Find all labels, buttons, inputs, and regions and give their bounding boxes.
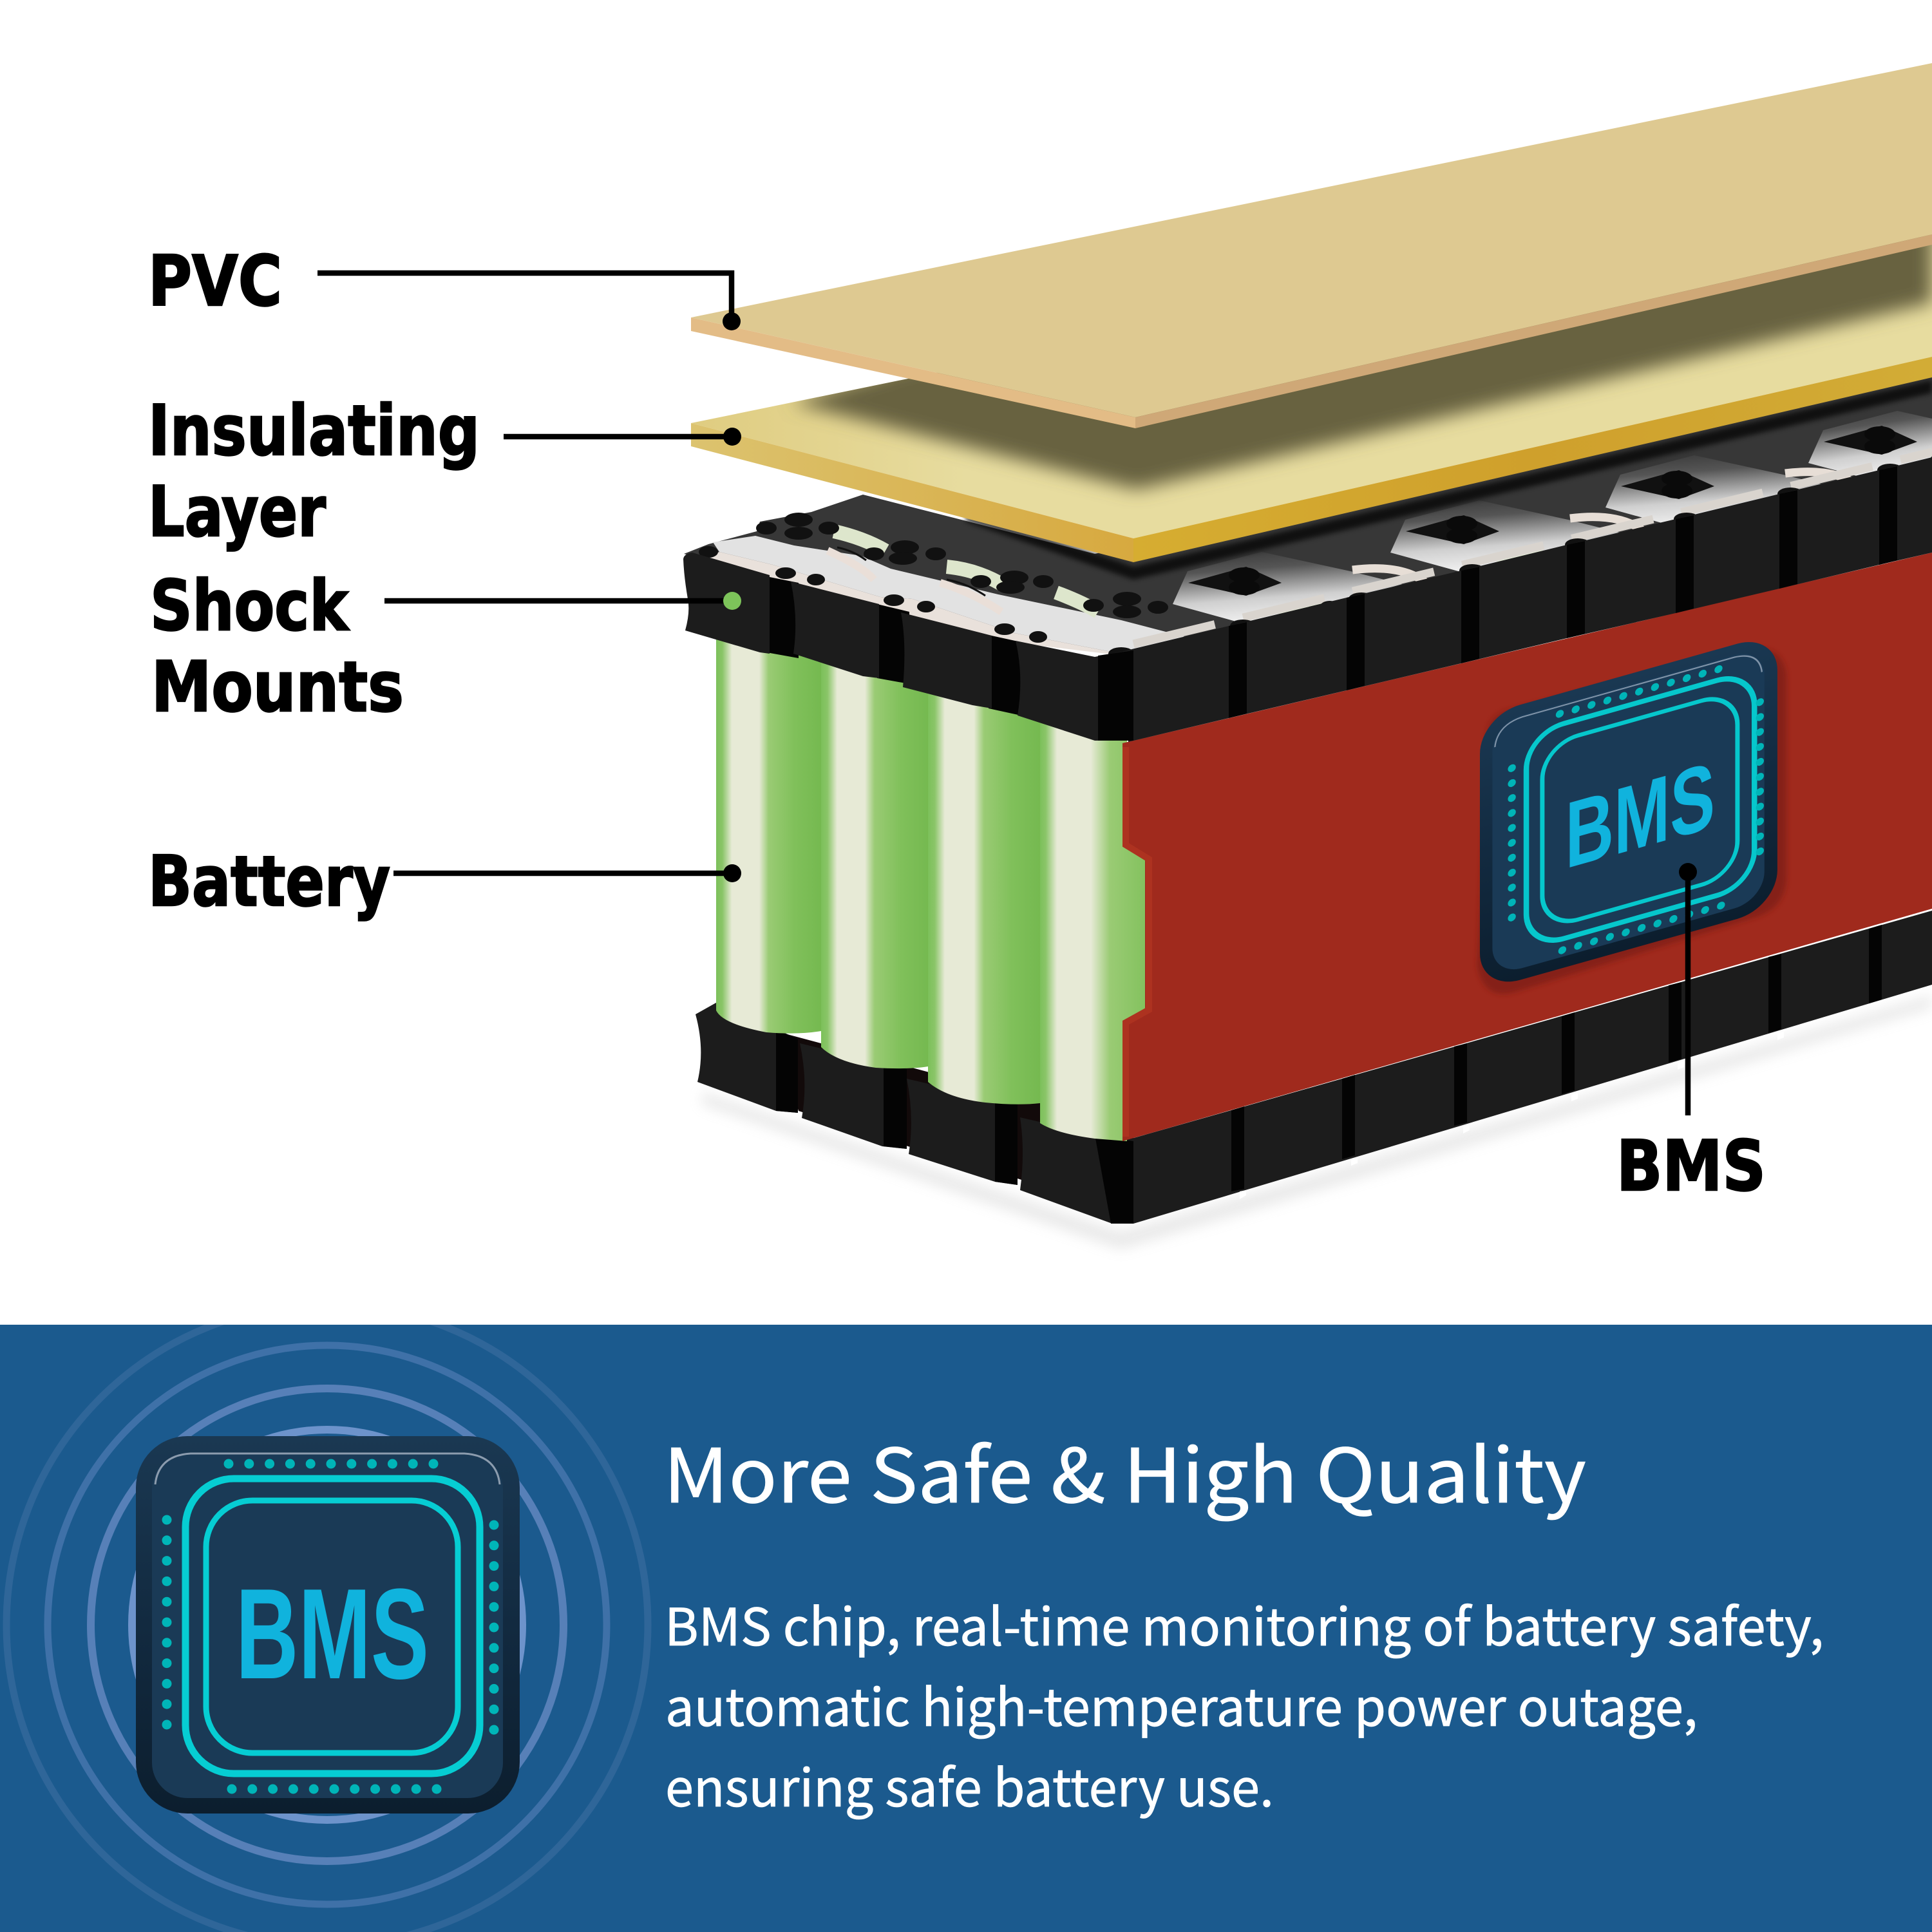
- heading: More Safe & High Quality: [663, 1416, 1586, 1524]
- battery pack illustration: [683, 361, 1932, 1249]
- green battery cells: [716, 638, 1153, 1141]
- blue info panel: [0, 1304, 1932, 1932]
- BMS chip icon: [136, 1436, 520, 1814]
- label: Insulating Layer: Insulating: [148, 391, 480, 471]
- label: Insulating Layer: Layer: [148, 472, 326, 553]
- top shock mounts: [683, 457, 1932, 742]
- description: ensuring safe battery use.: [665, 1747, 1274, 1822]
- label: Battery: Battery: [148, 842, 390, 922]
- mounting posts: [699, 464, 1903, 660]
- BMS chip on pack: [1477, 632, 1786, 994]
- description: BMS chip, real-time monitoring of battery safety,: [665, 1586, 1824, 1661]
- label: BMS: [1616, 863, 1766, 1207]
- label: PVC: [148, 242, 741, 330]
- label: Shock Mounts: Mounts: [151, 647, 404, 728]
- metal tiles: [1173, 411, 1932, 626]
- BMS chip icon: BMS: [236, 1562, 429, 1706]
- label: Battery: [148, 842, 741, 922]
- red wrap panel: [1122, 553, 1932, 1141]
- label: Shock Mounts: Shock: [150, 566, 350, 647]
- description: automatic high-temperature power outage,: [665, 1667, 1698, 1741]
- bottom shock mounts: [696, 911, 1932, 1224]
- label: BMS: BMS: [1616, 1126, 1766, 1207]
- pack top face: [684, 361, 1932, 660]
- concentric rings: [6, 1304, 648, 1932]
- label: Insulating Layer: [148, 391, 741, 553]
- BMS chip on pack: BMS: [1566, 741, 1715, 889]
- shadow under insulating layer: [966, 380, 1932, 580]
- description: [665, 1586, 1824, 1822]
- PVC sheet: [691, 63, 1932, 428]
- label: Shock Mounts: [150, 566, 741, 728]
- insulating layer sheet: [691, 234, 1932, 562]
- label: PVC: PVC: [148, 242, 282, 322]
